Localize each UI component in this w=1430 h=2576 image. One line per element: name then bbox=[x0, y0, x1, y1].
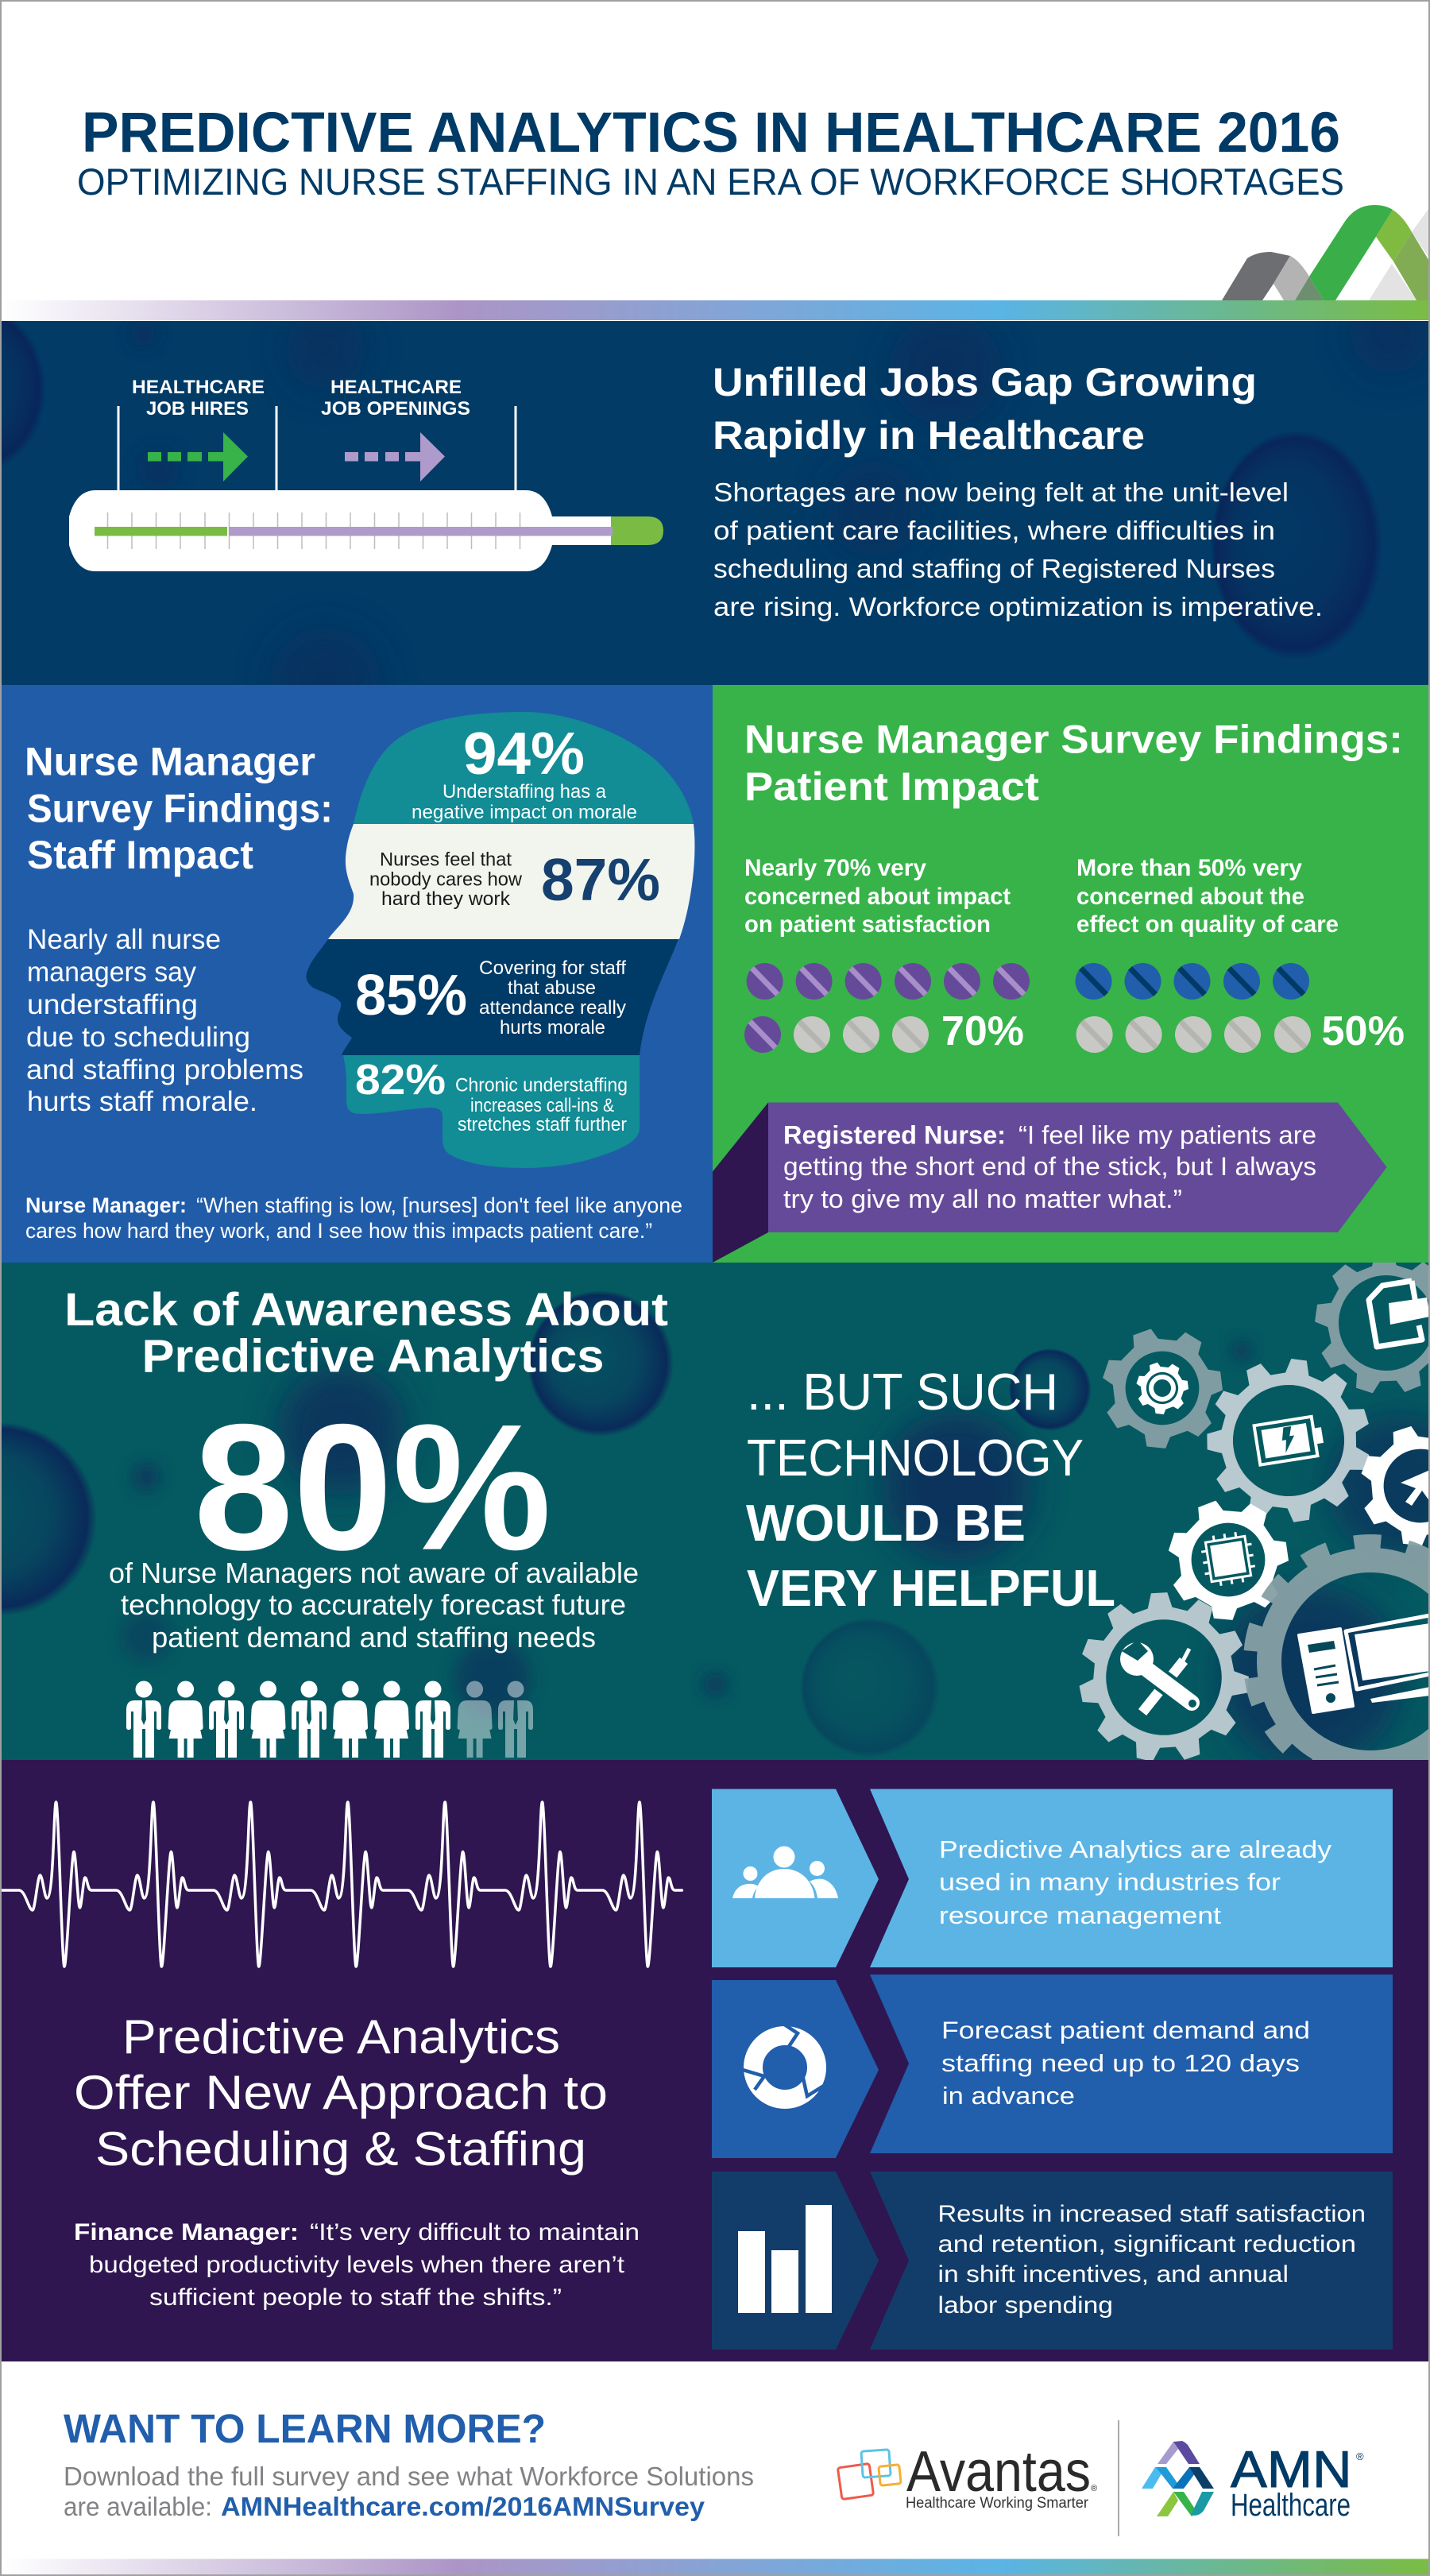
text: 70 percent concern: concerned about impact bbox=[744, 884, 1011, 910]
heading: patient impact bbox=[744, 717, 1403, 809]
icon: bar chart bbox=[738, 2205, 832, 2313]
logo: amn healthcare: ® bbox=[1356, 2450, 1364, 2462]
heading: staff impact bbox=[25, 739, 333, 877]
text: of nurse managers: technology to accurately forecast future bbox=[121, 1588, 626, 1621]
text: nearly all: Nearly all nurse bbox=[27, 924, 221, 955]
band: 82%: stretches staff further bbox=[458, 1114, 627, 1135]
heading: staff impact: Staff Impact bbox=[27, 833, 253, 877]
text: download survey: are available: bbox=[64, 2492, 212, 2521]
quote: finance manager bbox=[74, 2219, 640, 2311]
panel: patient impact bbox=[713, 685, 1430, 1263]
gear: cursor bbox=[1362, 1425, 1428, 1546]
text: nearly all: due to scheduling bbox=[26, 1022, 250, 1053]
chart: purple pills 70%: 70% bbox=[941, 1008, 1024, 1054]
text: download survey: AMNHealthcare.com/2016AMNSurvey bbox=[221, 2492, 705, 2521]
text: but such technology: TECHNOLOGY bbox=[747, 1429, 1084, 1487]
heading: new approach bbox=[74, 2010, 608, 2176]
band: 87%: Nurses feel that bbox=[380, 849, 512, 871]
box: forecast: Forecast patient demand and bbox=[941, 2017, 1310, 2044]
heading: lack of awareness: Predictive Analytics bbox=[141, 1331, 604, 1383]
band: 85%: that abuse bbox=[508, 977, 596, 999]
band: 85%: hurts morale bbox=[500, 1017, 605, 1039]
heading: want to learn more: WANT TO LEARN MORE? bbox=[64, 2406, 546, 2451]
text: 70 percent concern: on patient satisfaction bbox=[744, 911, 991, 938]
box: resource management: resource management bbox=[939, 1901, 1221, 1929]
band: 94%: negative impact on morale bbox=[412, 802, 637, 823]
text: of nurse managers bbox=[109, 1557, 639, 1654]
text: of nurse managers: of Nurse Managers not aware of available bbox=[109, 1557, 639, 1589]
job hires label bbox=[132, 377, 265, 420]
logo: avantas: ® bbox=[1091, 2484, 1097, 2493]
band: 82%: Chronic understaffing bbox=[455, 1074, 628, 1097]
heading: new approach: Scheduling & Staffing bbox=[95, 2122, 586, 2176]
callout: registered nurse: Registered Nurse: bbox=[783, 1121, 1006, 1150]
band: 94%: Understaffing has a bbox=[443, 781, 607, 803]
box: results: in shift incentives, and annual bbox=[937, 2261, 1289, 2288]
box: forecast: staffing need up to 120 days bbox=[941, 2049, 1300, 2077]
heading: unfilled jobs gap bbox=[713, 360, 1257, 458]
chart: head bbox=[306, 712, 694, 1168]
gears bbox=[1079, 1263, 1428, 1760]
text: download survey: Download the full survey and see what Workforce Solutions bbox=[64, 2462, 754, 2491]
heading: patient impact: Nurse Manager Survey Findings: bbox=[744, 717, 1403, 761]
band: 87%: nobody cares how bbox=[369, 869, 523, 891]
band: 85%: Covering for staff bbox=[479, 957, 626, 979]
band: 87%: hard they work bbox=[381, 888, 511, 910]
text: nearly all: understaffing bbox=[27, 989, 198, 1020]
band: 82%: increases call-ins & bbox=[470, 1095, 614, 1116]
text: 50 percent concern: effect on quality of care bbox=[1076, 911, 1339, 938]
band: 82% bbox=[343, 1055, 640, 1168]
band: 87% bbox=[328, 824, 694, 939]
box: resource management: used in many industries for bbox=[939, 1868, 1281, 1896]
gear: battery bbox=[1207, 1359, 1370, 1522]
job hires label: JOB HIRES bbox=[146, 398, 249, 420]
computer monitor bbox=[1346, 1615, 1430, 1703]
heading: lack of awareness bbox=[64, 1284, 668, 1383]
quote: nurse manager: “When staffing is low, [nurses] don't feel like anyone bbox=[196, 1193, 682, 1217]
logo: amn healthcare bbox=[1142, 2440, 1364, 2523]
computer tower bbox=[1299, 1629, 1353, 1712]
panel: new approach bbox=[0, 1760, 1430, 2361]
band: 94% bbox=[354, 712, 694, 824]
logo: avantas: Avantas bbox=[906, 2440, 1091, 2504]
text: nearly all: hurts staff morale. bbox=[27, 1086, 257, 1117]
text: nearly all: managers say bbox=[27, 957, 196, 988]
heading: new approach: Predictive Analytics bbox=[122, 2010, 560, 2064]
text: 50 percent concern bbox=[1076, 855, 1339, 938]
box: results bbox=[712, 2172, 1393, 2350]
chart: blue pills 50% bbox=[1076, 963, 1405, 1054]
chart: blue pills 50%: 50% bbox=[1322, 1008, 1405, 1054]
heading: lack of awareness: Lack of Awareness About bbox=[64, 1284, 668, 1336]
heading: new approach: Offer New Approach to bbox=[74, 2066, 608, 2119]
box: resource management: Predictive Analytics are already bbox=[939, 1835, 1332, 1863]
icon: mountain logo bbox=[1222, 205, 1430, 300]
callout: registered nurse: try to give my all no matter what.” bbox=[783, 1185, 1182, 1213]
panel: unfilled jobs gap bbox=[2, 321, 1428, 685]
gear: document bbox=[1315, 1263, 1428, 1394]
quote: nurse manager: Nurse Manager: bbox=[25, 1193, 187, 1217]
gear: settings bbox=[1103, 1329, 1223, 1449]
text: 50 percent concern: More than 50% very bbox=[1076, 855, 1302, 881]
title: PREDICTIVE ANALYTICS IN HEALTHCARE 2016 bbox=[82, 102, 1340, 164]
text: shortages: scheduling and staffing of Registered Nurses bbox=[713, 554, 1275, 583]
text: 70 percent concern: Nearly 70% very bbox=[744, 855, 926, 881]
quote: finance manager: sufficient people to staff the shifts.” bbox=[149, 2284, 562, 2311]
logo: avantas bbox=[837, 2440, 1097, 2512]
chart: purple pills 70% bbox=[744, 963, 1030, 1054]
panel: lack of awareness bbox=[2, 1263, 1428, 1760]
quote: finance manager: “It’s very difficult to maintain bbox=[310, 2219, 640, 2245]
gear: chip bbox=[1168, 1500, 1289, 1620]
callout: registered nurse: “I feel like my patients are bbox=[1018, 1121, 1316, 1150]
text: shortages: of patient care facilities, where difficulties in bbox=[713, 516, 1275, 545]
text: shortages: are rising. Workforce optimization is imperative. bbox=[713, 592, 1323, 621]
gradient strip bbox=[0, 300, 1430, 320]
job openings label bbox=[321, 377, 470, 420]
box: forecast: in advance bbox=[942, 2082, 1075, 2110]
logo: amn healthcare: Healthcare bbox=[1231, 2488, 1351, 2523]
logo: avantas: Healthcare Working Smarter bbox=[906, 2495, 1089, 2512]
text: of nurse managers: patient demand and staffing needs bbox=[152, 1621, 596, 1654]
chart: people row bbox=[126, 1681, 533, 1758]
box: results: and retention, significant reduction bbox=[937, 2231, 1356, 2257]
box: results: labor spending bbox=[937, 2292, 1113, 2319]
heading: staff impact: Survey Findings: bbox=[27, 787, 333, 831]
icon: people group bbox=[732, 1847, 838, 1898]
text: but such technology: VERY HELPFUL bbox=[747, 1559, 1115, 1617]
thermometer body bbox=[69, 490, 663, 571]
band: 82%: 82% bbox=[355, 1056, 446, 1104]
band: 85%: 85% bbox=[355, 964, 467, 1027]
gradient strip bottom bbox=[0, 2559, 1430, 2576]
panel: staff impact bbox=[0, 685, 713, 1263]
text: 70 percent concern bbox=[744, 855, 1011, 938]
callout: registered nurse: getting the short end of the stick, but I always bbox=[783, 1152, 1316, 1181]
text: 50 percent concern: concerned about the bbox=[1076, 884, 1304, 910]
heading: unfilled jobs gap: Rapidly in Healthcare bbox=[713, 413, 1145, 458]
text: shortages bbox=[713, 478, 1323, 621]
heading: patient impact: Patient Impact bbox=[744, 764, 1039, 809]
gear: computer bbox=[1244, 1534, 1428, 1760]
job hires label: HEALTHCARE bbox=[132, 377, 265, 398]
text: download survey bbox=[64, 2462, 754, 2521]
box: results: Results in increased staff satisfaction bbox=[937, 2201, 1366, 2227]
band: 94%: 94% bbox=[463, 720, 585, 787]
quote: finance manager: budgeted productivity levels when there aren’t bbox=[89, 2252, 625, 2278]
job openings label: JOB OPENINGS bbox=[321, 398, 470, 420]
text: nearly all: and staffing problems bbox=[26, 1054, 303, 1085]
subtitle: OPTIMIZING NURSE STAFFING IN AN ERA OF WORKFORCE SHORTAGES bbox=[77, 161, 1344, 203]
chart: heartbeat line bbox=[2, 1802, 682, 1967]
band: 87%: 87% bbox=[541, 846, 660, 913]
heading: unfilled jobs gap: Unfilled Jobs Gap Growing bbox=[713, 360, 1257, 404]
text: nearly all bbox=[26, 924, 303, 1117]
band: 85%: attendance really bbox=[479, 997, 626, 1019]
text: but such technology: WOULD BE bbox=[746, 1494, 1026, 1552]
quote: finance manager: Finance Manager: bbox=[74, 2219, 299, 2245]
header bbox=[0, 0, 1430, 321]
heading: staff impact: Nurse Manager bbox=[25, 739, 315, 783]
box: forecast bbox=[712, 1975, 1393, 2158]
callout: registered nurse bbox=[713, 1103, 1387, 1263]
footer bbox=[0, 2361, 1430, 2576]
band: 85% bbox=[306, 939, 678, 1055]
text: but such technology bbox=[746, 1363, 1115, 1617]
logo: amn healthcare: AMN bbox=[1231, 2440, 1352, 2498]
job openings label: HEALTHCARE bbox=[330, 377, 462, 398]
quote: nurse manager: cares how hard they work, and I see how this impacts patient care.” bbox=[25, 1219, 652, 1243]
box: resource management bbox=[712, 1789, 1393, 1967]
stat: 80%: 80% bbox=[194, 1387, 551, 1588]
arrow: green hires bbox=[148, 432, 248, 482]
quote: nurse manager bbox=[25, 1193, 682, 1243]
icon: circular arrows bbox=[743, 2024, 826, 2099]
thermometer graphic bbox=[69, 377, 663, 571]
text: shortages: Shortages are now being felt at the unit-level bbox=[713, 478, 1289, 507]
gear: tools bbox=[1079, 1592, 1249, 1760]
arrow: purple openings bbox=[345, 432, 445, 482]
text: but such technology: ... BUT SUCH bbox=[747, 1363, 1058, 1421]
